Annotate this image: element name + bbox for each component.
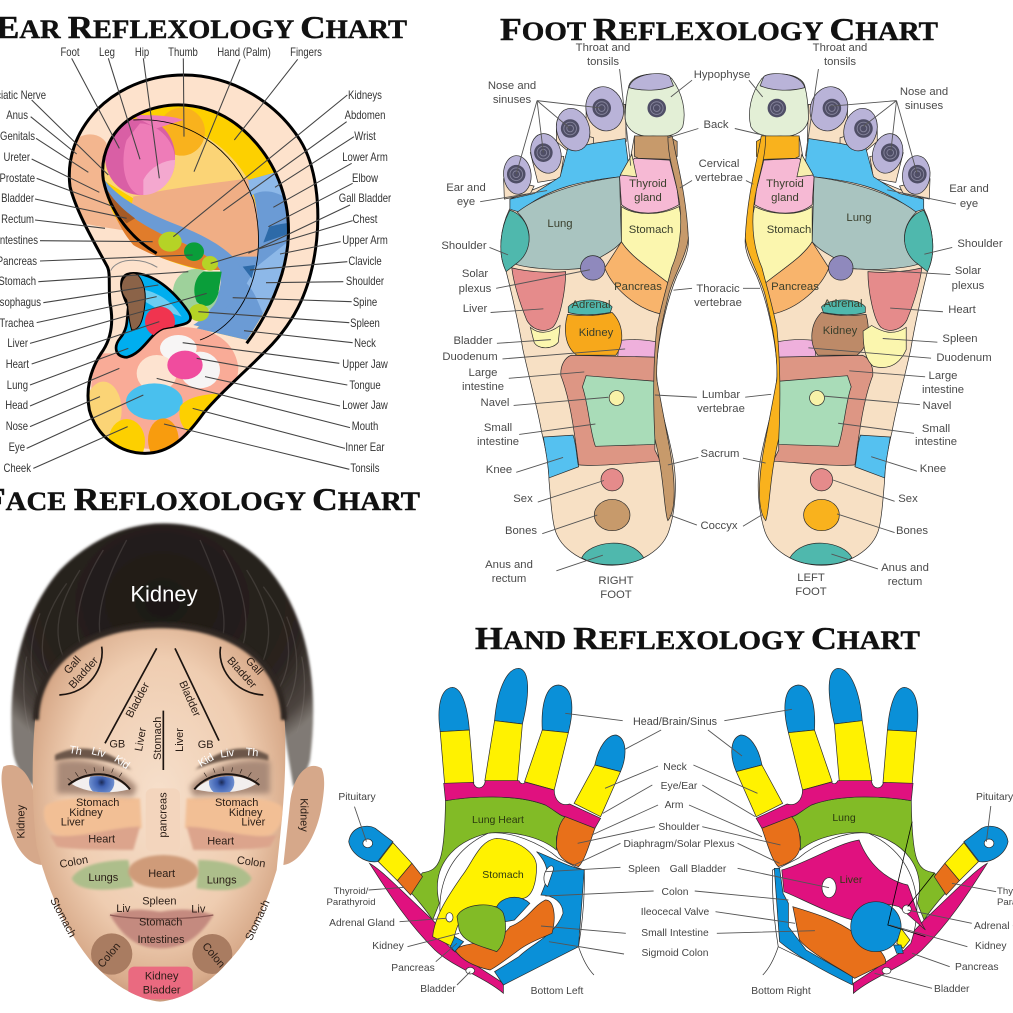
title: ear reflexology chart: EAR REFLEXOLOGY CHART [0, 9, 407, 45]
hand center labels: Spleen [628, 864, 660, 875]
face labels: Bladder [67, 655, 101, 691]
hand center labels: Head/Brain/Sinus [633, 716, 718, 728]
foot outer labels: Sacrum [701, 448, 739, 460]
face labels: GB [109, 738, 125, 750]
foot outer labels: Throat and [576, 42, 630, 54]
face labels: Kidney [145, 971, 179, 983]
foot outer labels: sinuses [493, 94, 531, 106]
face labels: Intestines [137, 934, 185, 946]
face labels: Kidney [15, 804, 27, 838]
ear left labels [0, 89, 46, 475]
ear right labels: Tonsils [350, 462, 380, 475]
ear right labels: Lower Arm [342, 151, 388, 164]
foot outer labels: Bladder [454, 335, 493, 347]
foot organ labels: Lung [846, 212, 872, 224]
hand leader lines [354, 709, 996, 988]
ear top labels: Thumb [168, 46, 198, 59]
face labels: Gall [62, 654, 84, 677]
face labels: Bladder [143, 985, 181, 997]
foot outer labels: Solar [462, 268, 488, 280]
face labels: Heart [148, 868, 175, 880]
foot outer labels: eye [457, 196, 475, 208]
hand left labels: Thyroid/ [334, 886, 369, 897]
face labels: GB [198, 739, 214, 751]
foot outer labels: plexus [952, 280, 985, 292]
foot outer labels: rectum [888, 576, 922, 588]
ear top labels: Fingers [290, 46, 322, 59]
icon: hair [11, 523, 313, 787]
ear right labels [339, 89, 392, 475]
ear illustration [63, 70, 323, 464]
foot organ labels: Kidney [579, 327, 614, 339]
face labels: Bladder [176, 679, 203, 719]
ear right labels: Spine [353, 296, 377, 309]
face labels: Gall [243, 655, 265, 678]
face labels: Lungs [207, 875, 237, 887]
face labels: pancreas [158, 792, 170, 838]
hand left labels: Kidney [372, 941, 405, 952]
face labels: Stomach [243, 898, 273, 943]
foot outer labels: Shoulder [441, 240, 487, 252]
face labels: Spleen [142, 896, 176, 908]
ear right labels: Abdomen [345, 109, 386, 122]
ear left labels: Cheek [3, 462, 32, 475]
face labels: Liver [133, 726, 149, 752]
ear left labels: Nose [6, 420, 28, 433]
ear left labels: Ureter [4, 151, 30, 164]
hand center labels [531, 716, 811, 997]
hand center labels: Bottom Left [531, 986, 583, 997]
hairline [36, 625, 284, 720]
ear right labels: Mouth [352, 420, 378, 433]
face labels: Kidney [298, 798, 310, 832]
ear right labels: Clavicle [348, 255, 382, 268]
title: foot reflexology chart: FOOT REFLEXOLOGY CHART [500, 11, 938, 47]
foot outer labels: Thoracic [696, 283, 740, 295]
foot outer labels: Ear and [949, 183, 989, 195]
ear left labels: Trachea [0, 317, 34, 330]
foot outer labels: intestine [477, 436, 519, 448]
face labels: Liver [174, 728, 186, 752]
ear right labels: Tongue [349, 379, 381, 392]
face labels: Liver [241, 816, 266, 828]
foot outer labels: Large [469, 367, 497, 379]
foot organ labels: Thyroid [629, 178, 667, 190]
ear top labels: Foot [60, 46, 80, 59]
face labels: Bladder [124, 680, 152, 720]
foot outer labels: intestine [915, 436, 957, 448]
hand organ labels: Liver [840, 874, 863, 886]
foot outer labels: Coccyx [700, 520, 738, 532]
foot outer labels: Throat and [813, 42, 867, 54]
ear left labels: Head [5, 399, 28, 412]
ear right labels: Upper Jaw [342, 358, 388, 371]
hand left labels: Pituitary [338, 792, 376, 803]
icon: ears [2, 765, 324, 865]
face skin [33, 625, 285, 1002]
foot outer labels: Back [703, 119, 729, 131]
foot outer labels: intestine [922, 384, 964, 396]
foot organ labels: Thyroid [766, 178, 804, 190]
foot outer labels: FOOT [600, 589, 632, 601]
foot outer labels: FOOT [795, 586, 827, 598]
ear right labels: Kidneys [348, 89, 382, 102]
ear left labels: Bladder [1, 192, 34, 205]
face labels: Liv [90, 745, 107, 761]
foot outer labels: Ear and [446, 182, 486, 194]
ear right labels: Gall Bladder [339, 192, 392, 205]
hand organ labels [472, 812, 863, 886]
foot outer labels: plexus [459, 283, 492, 295]
foot outer labels: Small [484, 422, 512, 434]
face labels [15, 582, 310, 997]
hand left labels: Bladder [420, 984, 456, 995]
foot organ labels: Pancreas [614, 281, 662, 293]
foot outer labels: Nose and [488, 80, 536, 92]
hand left labels [326, 792, 456, 995]
ear top labels: Hand (Palm) [217, 46, 271, 59]
face labels: Stomach [152, 717, 164, 760]
foot outer labels: Anus and [485, 559, 533, 571]
ear left labels: Eye [9, 441, 25, 454]
ear left labels: Genitals [0, 130, 35, 143]
face labels: Bladder [224, 655, 259, 691]
hand center labels: Arm [665, 800, 683, 811]
foot outer labels: tonsils [587, 56, 619, 68]
foot organ labels: gland [771, 192, 799, 204]
foot outer labels: Lumbar [702, 389, 740, 401]
face labels: Stomach [215, 797, 258, 809]
ear left labels: Heart [6, 358, 29, 371]
foot outer labels: Heart [948, 304, 977, 316]
foot outer labels: Nose and [900, 86, 948, 98]
face labels: Stomach [139, 916, 182, 928]
ear right labels: Elbow [352, 172, 378, 185]
hand right labels [934, 792, 1013, 995]
hand center labels: Diaphragm/Solar Plexus [623, 839, 735, 850]
face labels: Lungs [88, 872, 119, 884]
foot outer labels: Bones [896, 525, 928, 537]
foot organ labels: Adrenal [572, 299, 610, 311]
face labels: Kidney [229, 807, 263, 819]
face labels: Liv [116, 903, 131, 915]
foot organ labels: Stomach [629, 224, 673, 236]
foot organ labels: Lung [547, 218, 573, 230]
face labels: Stomach [76, 797, 119, 809]
foot outer labels: Large [929, 370, 957, 382]
foot organ labels: gland [634, 192, 662, 204]
foot organ labels: Stomach [767, 224, 811, 236]
face photo illustration [2, 523, 324, 1002]
foot outer labels: Knee [920, 463, 946, 475]
hand right labels: Pituitary [976, 792, 1013, 803]
face labels: Liv [191, 904, 206, 916]
icon: eyes and brows [55, 748, 270, 796]
ear right labels: Shoulder [346, 275, 385, 288]
panel: foot reflexology chart [441, 11, 1003, 601]
foot outer labels: Sex [513, 493, 533, 505]
face labels: Heart [88, 834, 115, 846]
ear top labels: Leg [99, 46, 115, 59]
ear left labels: Lung [7, 379, 28, 392]
foot outer labels: Navel [923, 400, 951, 412]
ear right labels: Wrist [354, 130, 376, 143]
face labels: Colon [199, 941, 227, 970]
foot outer labels: vertebrae [697, 403, 745, 415]
title: hand reflexology chart: HAND REFLEXOLOGY CHART [475, 620, 920, 656]
face labels: Colon [59, 854, 89, 871]
face labels: Kid [112, 753, 132, 772]
forehead lines [59, 647, 263, 770]
hand center labels: Colon [662, 887, 689, 898]
face labels: Colon [236, 854, 266, 870]
hand center labels: Shoulder [658, 822, 700, 833]
panel: hand reflexology chart [326, 620, 1013, 997]
panel: ear reflexology chart [0, 9, 407, 475]
foot outer labels: Knee [486, 464, 512, 476]
face labels: Colon [96, 941, 123, 970]
hand center labels: Neck [663, 762, 688, 773]
hand organ labels: Lung [832, 812, 856, 824]
left foot illustration [745, 74, 933, 565]
hand right labels: Pancreas [955, 962, 999, 973]
face labels: Stomach [47, 896, 78, 940]
hand left labels: Pancreas [391, 963, 435, 974]
foot outer labels: vertebrae [694, 297, 742, 309]
hand organ labels: Stomach [482, 869, 524, 881]
hand center labels: Ileocecal Valve [641, 907, 710, 918]
foot outer labels: eye [960, 198, 978, 210]
foot organ labels: Adrenal [824, 298, 862, 310]
foot leader lines [480, 69, 956, 571]
face labels: Kidney [69, 807, 103, 819]
foot organ labels: Kidney [823, 325, 858, 337]
ear top labels [60, 46, 322, 59]
ear left labels: Anus [6, 109, 28, 122]
right-side hand illustration [732, 668, 1008, 993]
foot outer labels: Small [922, 423, 950, 435]
face labels: Liv [219, 747, 236, 761]
foot outer labels: Hypophyse [694, 69, 750, 81]
face labels: Liver [61, 816, 85, 828]
ear left labels: Rectum [1, 213, 34, 226]
hand center labels: Gall Bladder [670, 864, 727, 875]
ear right labels: Chest [353, 213, 378, 226]
foot outer labels: Navel [481, 397, 509, 409]
ear right labels: Spleen [350, 317, 380, 330]
ear right labels: Lower Jaw [342, 399, 388, 412]
foot outer labels: Solar [955, 265, 981, 277]
ear right labels: Upper Arm [342, 234, 388, 247]
ear right labels: Inner Ear [345, 441, 385, 454]
foot organ labels: Pancreas [771, 281, 819, 293]
foot outer labels [441, 42, 1003, 601]
foot outer labels: Spleen [942, 333, 978, 345]
hand left labels: Adrenal Gland [329, 918, 395, 929]
left-side hand illustration [349, 668, 625, 993]
panel: face reflexology chart [0, 481, 420, 1002]
foot outer labels: Duodenum [442, 351, 498, 363]
facial zones [44, 788, 283, 999]
ear right labels: Neck [354, 337, 377, 350]
face labels: Kidney [130, 582, 198, 607]
foot outer labels: Sex [898, 493, 918, 505]
face labels: Th [68, 744, 83, 758]
ear leader lines [27, 58, 354, 469]
foot outer labels: sinuses [905, 100, 943, 112]
foot outer labels: tonsils [824, 56, 856, 68]
foot organ labels [547, 178, 872, 339]
face labels: Heart [207, 835, 234, 847]
face labels: Th [245, 746, 259, 759]
foot outer labels: Anus and [881, 562, 929, 574]
foot outer labels: rectum [492, 573, 526, 585]
hand center labels: Sigmoid Colon [642, 948, 709, 959]
hand left labels: Parathyroid [326, 897, 376, 908]
hand center labels: Eye/Ear [661, 781, 698, 792]
hand organ labels: Lung Heart [472, 814, 524, 826]
foot outer labels: Cervical [699, 158, 739, 170]
ear left labels: Prostate [0, 172, 35, 185]
ear top labels: Hip [135, 46, 149, 59]
ear left labels: Liver [7, 337, 28, 350]
foot outer labels: intestine [462, 381, 504, 393]
foot outer labels: Duodenum [936, 352, 992, 364]
foot outer labels: vertebrae [695, 172, 743, 184]
hand center labels: Bottom Right [751, 986, 811, 997]
hand center labels: Small Intestine [641, 928, 709, 939]
foot outer labels: LEFT [797, 572, 825, 584]
foot outer labels: RIGHT [598, 575, 634, 587]
hand right labels: Kidney [975, 941, 1007, 952]
face labels: Kid [196, 752, 216, 770]
hand right labels: Bladder [934, 984, 970, 995]
right foot illustration [501, 74, 688, 565]
foot outer labels: Bones [505, 525, 537, 537]
foot outer labels: Liver [463, 303, 487, 315]
foot outer labels: Shoulder [957, 238, 1003, 250]
